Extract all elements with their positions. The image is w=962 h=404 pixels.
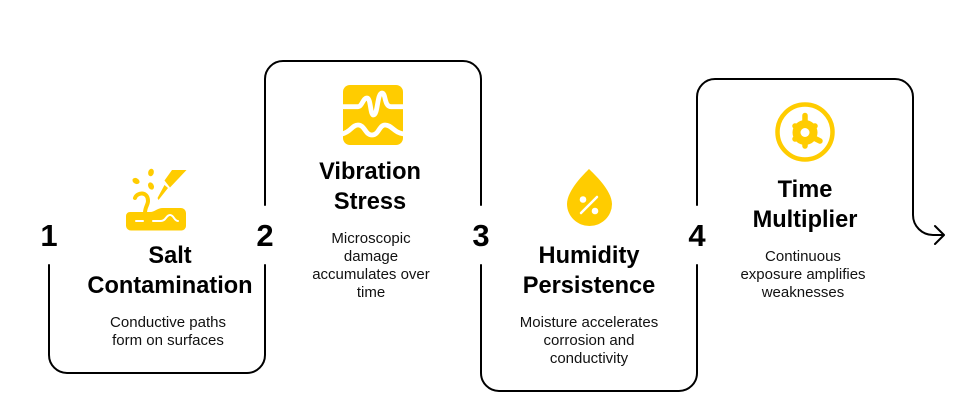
- heading: humidity persistence: Persistence: [523, 273, 655, 299]
- heading: vibration stress: Stress: [334, 189, 406, 215]
- text: vibration stress description: [312, 230, 430, 301]
- step number 2: 2: [256, 218, 274, 253]
- step number 4: 4: [688, 218, 706, 253]
- heading: vibration stress: [319, 159, 421, 215]
- text: vibration stress description: Microscopic: [331, 230, 411, 247]
- text: humidity persistence description: Moisture accelerates: [520, 314, 658, 331]
- text: time multiplier description: [740, 248, 866, 301]
- heading: time multiplier: [753, 177, 858, 233]
- heading: salt contamination: Contamination: [87, 273, 253, 299]
- heading: humidity persistence: [523, 243, 655, 299]
- text: humidity persistence description: corrosion and: [544, 332, 634, 349]
- text: time multiplier description: weaknesses: [762, 284, 844, 301]
- text: humidity persistence description: [520, 314, 658, 367]
- text: vibration stress description: time: [357, 284, 385, 301]
- text: time multiplier description: Continuous: [765, 248, 841, 265]
- text: salt contamination description: [110, 314, 226, 349]
- heading: humidity persistence: Humidity: [539, 243, 639, 269]
- heading: salt contamination: [87, 243, 253, 299]
- text: vibration stress description: accumulates over: [312, 266, 430, 283]
- heading: salt contamination: Salt: [148, 243, 192, 269]
- text: salt contamination description: Conductive paths: [110, 314, 226, 331]
- text: humidity persistence description: conductivity: [550, 350, 628, 367]
- step number 3: 3: [472, 218, 490, 253]
- heading: time multiplier: Time: [778, 177, 832, 203]
- text: time multiplier description: exposure amplifies: [740, 266, 866, 283]
- step number 1: 1: [40, 218, 58, 253]
- heading: vibration stress: Vibration: [319, 159, 421, 185]
- heading: time multiplier: Multiplier: [753, 207, 857, 233]
- text: salt contamination description: form on surfaces: [112, 332, 224, 349]
- text: vibration stress description: damage: [344, 248, 398, 265]
